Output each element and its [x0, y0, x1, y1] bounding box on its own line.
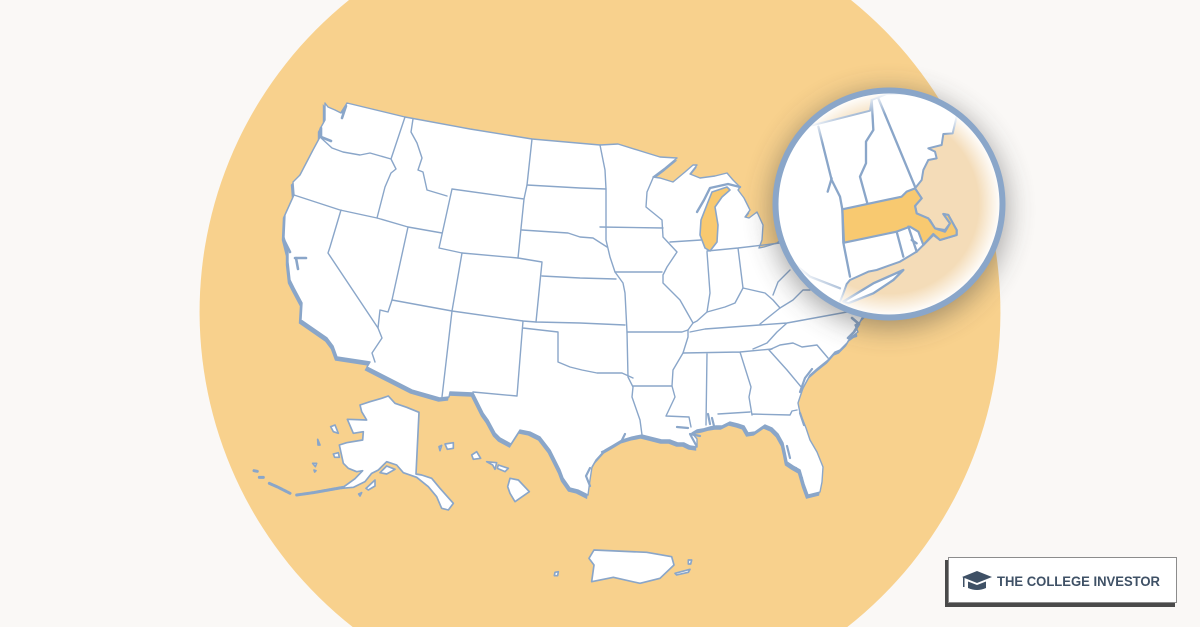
Alaska mainland and panhandle [339, 396, 453, 510]
logo badge shadow [945, 560, 1175, 607]
icon: graduation cap [962, 571, 992, 590]
magnifier lens ring [776, 90, 1002, 318]
Hawaii [439, 443, 529, 502]
magnifier lens shadow [771, 92, 1007, 328]
New England land [780, 94, 958, 303]
New England state borders [793, 98, 917, 288]
background yellow circle [200, 0, 1000, 627]
lens sea [816, 96, 998, 314]
Puerto Rico [554, 550, 692, 583]
Aleutian chain [254, 471, 343, 495]
Lake Michigan [700, 187, 730, 251]
lens inner glow [796, 94, 1000, 314]
contiguous states silhouette shadow [282, 106, 878, 498]
logo badge: The College Investor [945, 558, 1176, 607]
Long Island [843, 270, 903, 303]
Pacific and Atlantic coast details [284, 106, 859, 486]
Massachusetts highlighted [842, 188, 957, 245]
map of the United States [282, 103, 880, 498]
Alaska islands [313, 425, 395, 496]
state borders [294, 117, 847, 435]
contiguous states land [284, 103, 880, 495]
Alaska [254, 396, 453, 510]
magnifier lens: New England close-up [778, 94, 1000, 314]
logo badge box [948, 558, 1176, 602]
logo wordmark: THE COLLEGE INVESTOR [997, 574, 1160, 589]
